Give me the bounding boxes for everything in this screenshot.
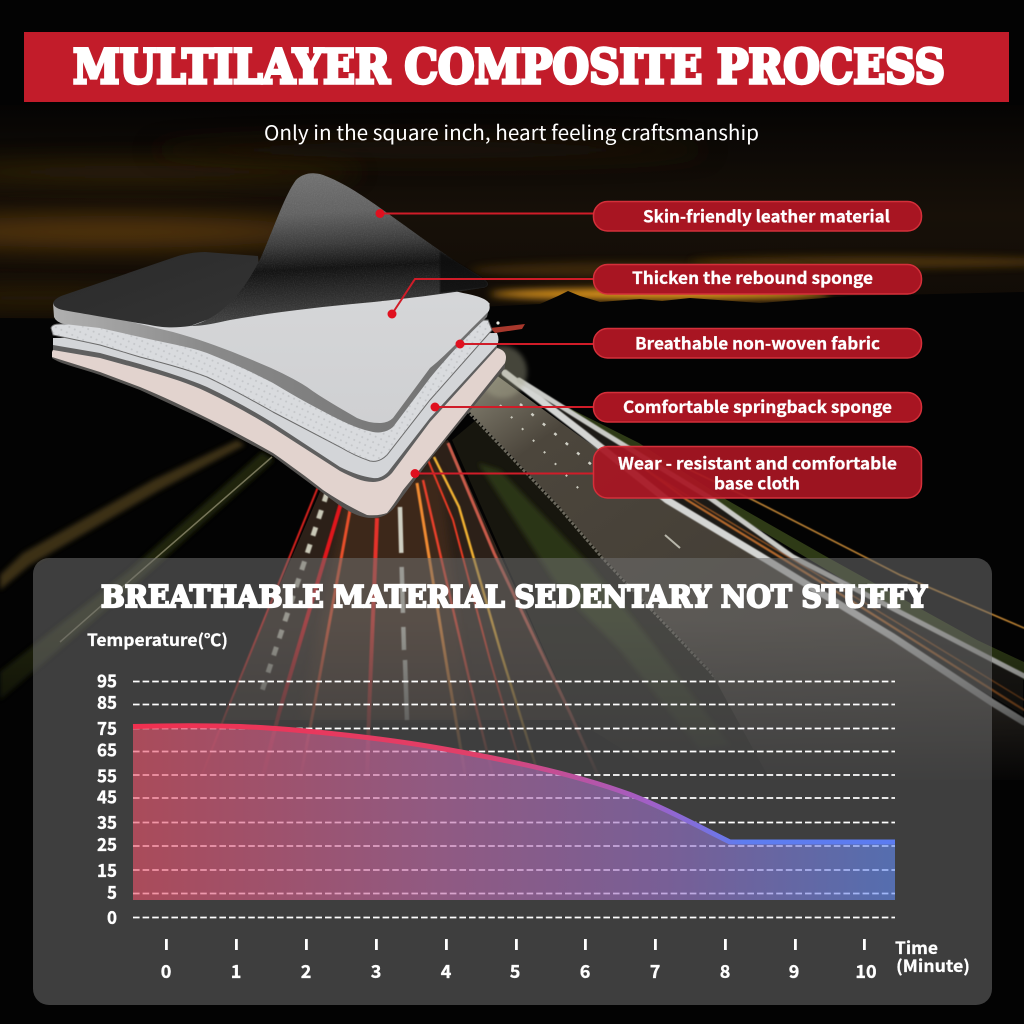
horizon tree line bbox=[0, 291, 1024, 350]
area chart bbox=[97, 668, 895, 930]
y axis labels bbox=[97, 668, 117, 930]
left carriageway edge line bbox=[60, 457, 272, 642]
y axis labels: 45 bbox=[97, 784, 117, 810]
left field verge bbox=[0, 440, 245, 590]
x labels: 2 bbox=[301, 958, 311, 984]
label: comfortable springback sponge bbox=[594, 392, 922, 422]
y axis labels: 15 bbox=[97, 857, 117, 883]
y axis labels: 85 bbox=[97, 689, 117, 715]
flap tip shadow bbox=[440, 252, 488, 293]
layer: thick rebound sponge bbox=[53, 255, 490, 432]
temperature area bbox=[133, 724, 895, 900]
panel: breathable chart bbox=[33, 558, 992, 1005]
white light trails bbox=[505, 373, 1024, 722]
y axis title: Temperature(℃) bbox=[87, 627, 228, 651]
x axis title: Time bbox=[895, 935, 938, 959]
right carriageway bbox=[468, 372, 1024, 780]
y axis labels: 75 bbox=[97, 715, 117, 741]
y axis labels: 55 bbox=[97, 762, 117, 788]
x labels: 0 bbox=[161, 958, 171, 984]
x labels: 6 bbox=[580, 958, 590, 984]
connector: base cloth bbox=[410, 469, 595, 478]
connector lines and dots bbox=[376, 209, 595, 478]
label: comfortable springback sponge: Comfortable springback sponge bbox=[623, 394, 892, 418]
y axis labels: 0 bbox=[107, 904, 117, 930]
layer: breathable non-woven fabric bbox=[51, 320, 492, 461]
panel heading: BREATHABLE MATERIAL SEDENTARY NOT STUFFY bbox=[101, 580, 928, 615]
title banner bbox=[24, 32, 1009, 102]
y axis labels: 35 bbox=[97, 809, 117, 835]
label: wear-resistant base cloth: Wear - resistant and comfortable bbox=[618, 450, 897, 474]
y axis labels: 5 bbox=[107, 879, 117, 905]
label pills bbox=[594, 202, 922, 498]
x labels: 5 bbox=[510, 958, 520, 984]
central grass and barrier bbox=[452, 420, 760, 760]
x labels: 3 bbox=[371, 958, 381, 984]
layer: comfortable springback sponge bbox=[53, 333, 498, 482]
x labels: 7 bbox=[650, 958, 660, 984]
x labels: 9 bbox=[789, 958, 799, 984]
road strip between trails bbox=[519, 380, 1023, 715]
grid lines bbox=[133, 682, 895, 918]
label: breathable non-woven fabric bbox=[594, 328, 922, 358]
y axis labels: 25 bbox=[97, 831, 117, 857]
label: skin-friendly leather material: Skin-friendly leather material bbox=[643, 204, 890, 228]
connector: rebound sponge bbox=[388, 279, 595, 318]
central carriageway bbox=[222, 440, 575, 720]
label: wear-resistant base cloth bbox=[594, 446, 922, 498]
ticks bbox=[165, 939, 866, 950]
sky glow bands bbox=[0, 140, 1024, 306]
label: thicken the rebound sponge: Thicken the rebound sponge bbox=[632, 265, 873, 289]
x axis title: (Minute) bbox=[896, 953, 970, 977]
y axis labels: 95 bbox=[97, 668, 117, 694]
red and orange light trails bbox=[200, 443, 600, 780]
x labels: 10 bbox=[855, 958, 877, 984]
connector: non-woven bbox=[456, 340, 595, 348]
title text: MULTILAYER COMPOSITE PROCESS bbox=[73, 40, 945, 95]
temperature curve bbox=[133, 726, 895, 842]
label: skin-friendly leather material bbox=[594, 202, 922, 231]
x labels: 4 bbox=[441, 958, 452, 984]
label: wear-resistant base cloth: base cloth bbox=[714, 470, 800, 494]
connector: springback sponge bbox=[430, 402, 595, 412]
x axis title bbox=[895, 935, 970, 977]
x labels: 8 bbox=[720, 958, 730, 984]
connector: leather bbox=[376, 209, 595, 218]
x axis bbox=[161, 935, 970, 984]
layer: leather top with peeled flap bbox=[53, 173, 488, 327]
right verge grass bbox=[547, 397, 1024, 680]
y axis labels: 65 bbox=[97, 736, 117, 762]
distant car bbox=[490, 321, 525, 333]
x labels: 1 bbox=[231, 958, 241, 984]
subtitle: Only in the square inch, heart feeling craftsmanship bbox=[264, 117, 759, 146]
label: breathable non-woven fabric: Breathable non-woven fabric bbox=[635, 330, 880, 354]
layer: base cloth bbox=[52, 347, 506, 518]
x labels bbox=[161, 958, 877, 984]
label: thicken the rebound sponge bbox=[594, 264, 922, 294]
fade of the road into darkness bbox=[0, 620, 1024, 790]
composite material layers illustration bbox=[51, 173, 506, 518]
